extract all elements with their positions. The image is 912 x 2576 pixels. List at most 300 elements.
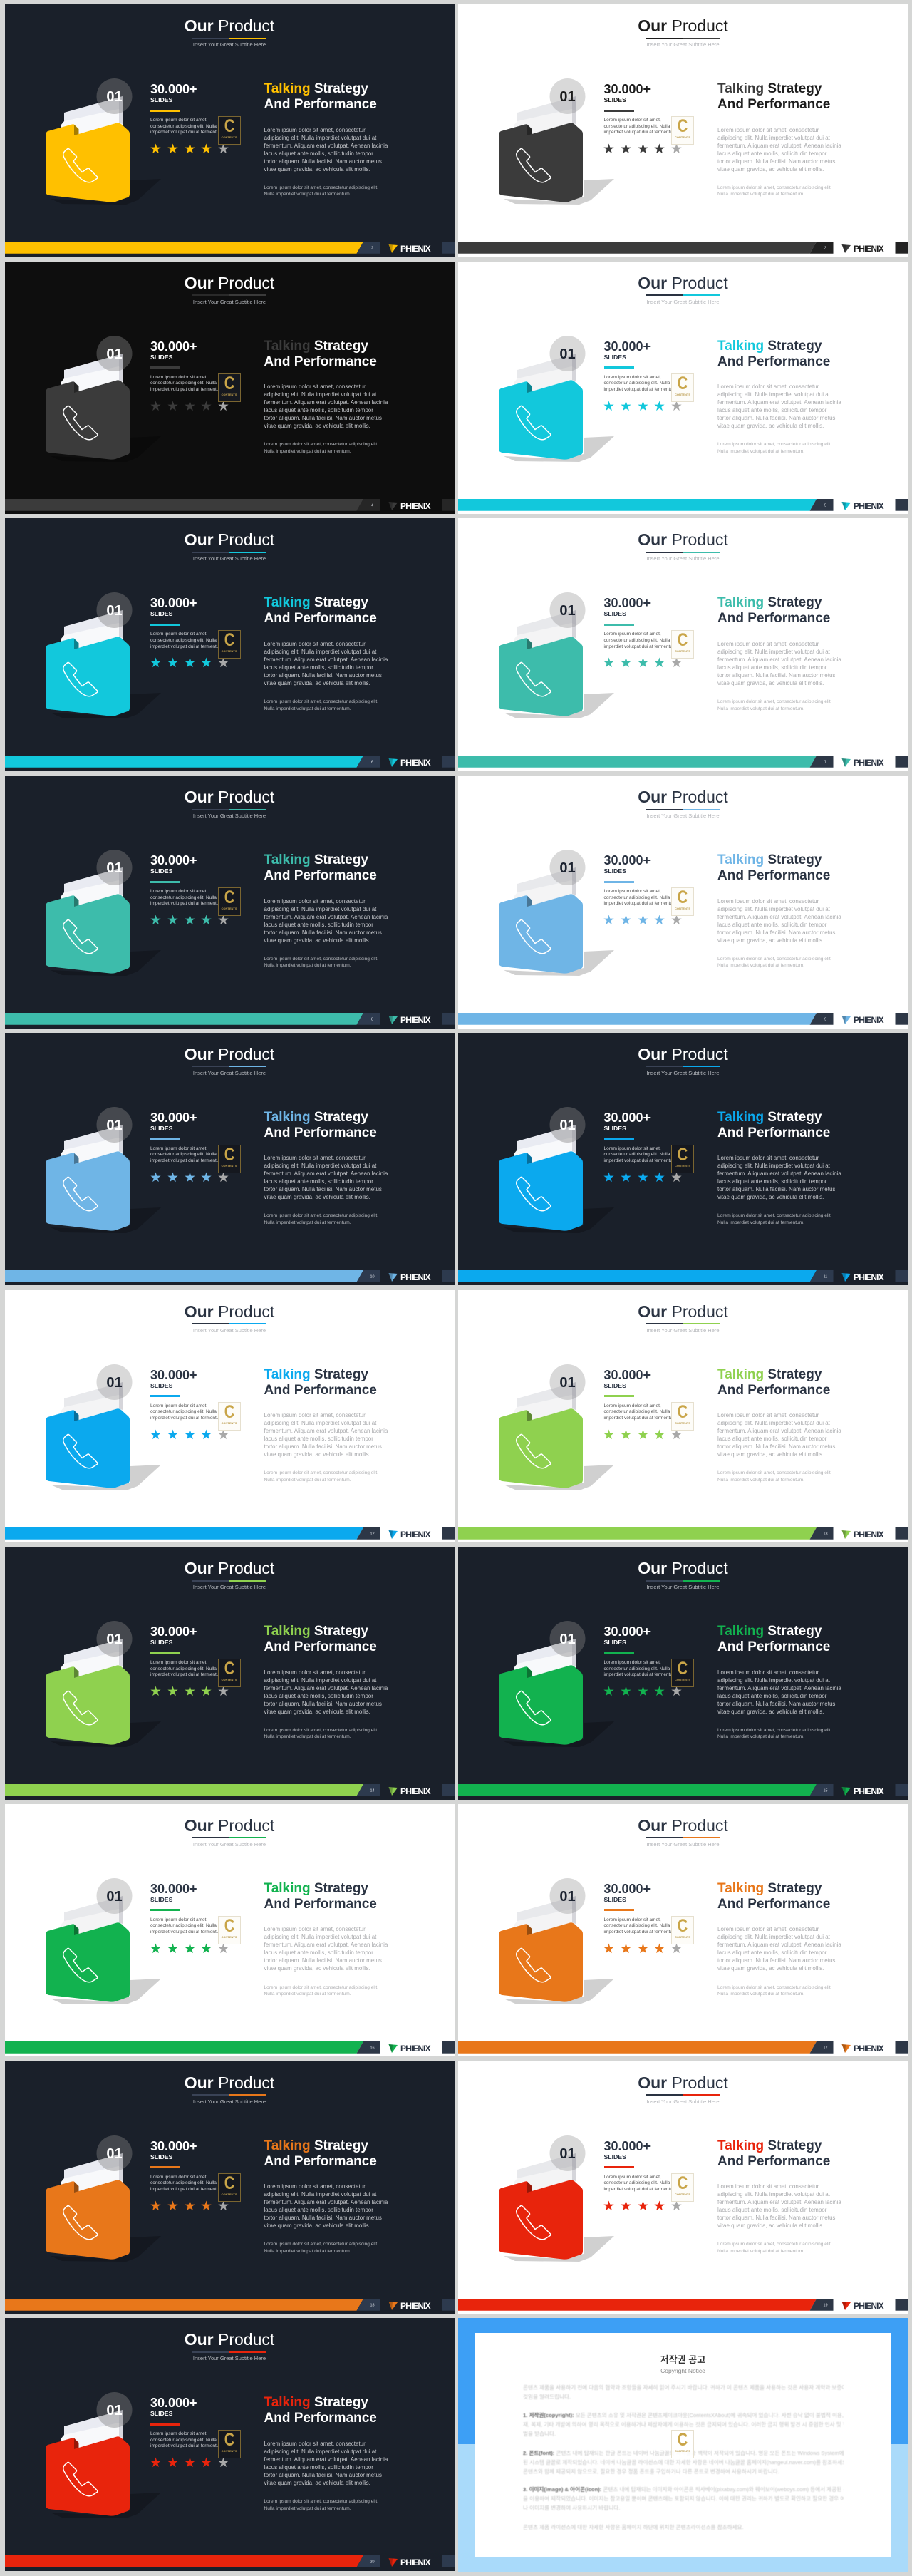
paragraph [717, 2183, 841, 2230]
footer bar: 11 [824, 1274, 827, 1279]
footer bar: PHIENIX [400, 1786, 430, 1796]
watermark [671, 2430, 694, 2458]
paragraph: Lorem ipsum dolor sit amet, consectetur [717, 641, 819, 647]
text block: Lorem ipsum dolor sit amet, [150, 2431, 207, 2436]
small note: Nulla imperdiet volutpat dui at fermentum. [717, 1478, 804, 1483]
watermark: CONTENTS [675, 2193, 690, 2196]
footer bar: PHIENIX [854, 1786, 884, 1796]
panel: slide 8 teal on navy [4, 776, 455, 1029]
paragraph: vitae quam gravida, ac vehicula elit mollis. [717, 1965, 824, 1972]
text block: Lorem ipsum dolor sit amet, [150, 1660, 207, 1665]
paragraph [264, 1669, 388, 1716]
stat: slides count: SLIDES [150, 610, 172, 617]
illustration: folder with phone and number badge: 01 [559, 346, 576, 362]
heading: And Performance [264, 868, 377, 883]
footer bar: 19 [823, 2303, 828, 2307]
footer bar [458, 2299, 908, 2314]
star rating [147, 2199, 232, 2213]
title underline [646, 1323, 720, 1324]
stat: slides count: 30.000+ [150, 82, 197, 96]
title underline [646, 1837, 720, 1838]
paragraph: Lorem ipsum dolor sit amet, consectetur [264, 2441, 366, 2447]
watermark [218, 1916, 241, 1944]
panel: copyright notice [458, 2318, 908, 2572]
small note [264, 1212, 378, 1227]
paragraph: tortor aliquam. Nulla facilisi. Nam auctor metus [264, 672, 382, 679]
illustration: folder with phone and number badge [4, 2318, 455, 2571]
paragraph: vitae quam gravida, ac vehicula elit mollis. [717, 423, 824, 429]
footer bar [458, 2041, 908, 2057]
small note [717, 1727, 832, 1741]
panel: slide 19 red on white [458, 2061, 908, 2314]
text block: imperdiet volutpat dui at fermentum [604, 1930, 676, 1934]
footer bar: 18 [370, 2303, 374, 2307]
heading [264, 1624, 377, 1655]
star rating [601, 1942, 686, 1956]
illustration: folder with phone and number badge [458, 1290, 908, 1542]
paragraph: vitae quam gravida, ac vehicula elit mollis. [264, 1194, 370, 1200]
footer bar: 9 [824, 1018, 826, 1022]
paragraph: Lorem ipsum dolor sit amet, consectetur [717, 898, 819, 905]
small note [264, 956, 378, 969]
paragraph: adipiscing elit. Nulla imperdiet volutpat dui at [264, 391, 376, 398]
small note [264, 2241, 378, 2255]
small note: Nulla imperdiet volutpat dui at fermentum. [717, 2249, 804, 2254]
stat: slides count: 30.000+ [150, 2139, 197, 2153]
paragraph: vitae quam gravida, ac vehicula elit mollis. [717, 2222, 824, 2229]
text block: consectetur adipiscing elit. Nulla [604, 1152, 670, 1157]
paragraph: lacus aliquet ante mollis, sollicitudin tempor [264, 1178, 373, 1185]
footer bar: 5 [824, 503, 826, 508]
paragraph: fermentum. Aliquam erat volutpat. Aenean lacinia [717, 399, 841, 406]
illustration: folder with phone and number badge [46, 336, 133, 459]
footer bar: 10 [370, 1274, 374, 1279]
title underline [646, 294, 720, 296]
watermark: C [678, 116, 688, 136]
paragraph: Lorem ipsum dolor sit amet, consectetur [717, 1926, 819, 1932]
small note: Lorem ipsum dolor sit amet, consectetur adipiscing elit. [717, 442, 832, 447]
watermark: CONTENTS [675, 1164, 690, 1168]
notice sheet [475, 2333, 891, 2557]
small note: Lorem ipsum dolor sit amet, consectetur adipiscing elit. [717, 1213, 832, 1218]
panel: slide 12 blue on white [4, 1290, 455, 1542]
footer bar [458, 1013, 908, 1029]
star rating [601, 2199, 686, 2213]
stat: slides count: 30.000+ [150, 1882, 197, 1896]
heading: Talking Strategy [264, 2395, 368, 2410]
paragraph [264, 1411, 388, 1458]
small note [717, 2241, 832, 2255]
text block: consectetur adipiscing elit. Nulla [604, 1923, 670, 1928]
paragraph: Lorem ipsum dolor sit amet, consectetur [264, 898, 366, 905]
text block: consectetur adipiscing elit. Nulla [604, 124, 670, 129]
text block: Lorem ipsum dolor sit amet, [604, 375, 661, 380]
watermark: CONTENTS [675, 2449, 690, 2453]
heading: Talking Strategy [264, 81, 368, 96]
watermark: C [678, 1916, 688, 1936]
paragraph: Lorem ipsum dolor sit amet, consectetur [264, 641, 366, 647]
stat: slides count: 30.000+ [150, 1111, 197, 1125]
illustration: folder with phone and number badge [458, 776, 908, 1029]
paragraph: fermentum. Aliquam erat volutpat. Aenean lacinia [717, 1170, 841, 1177]
footer bar: 6 [370, 761, 373, 765]
stat: slides count: 30.000+ [150, 596, 197, 610]
title underline [192, 1580, 266, 1582]
illustration: folder with phone and number badge [458, 2061, 908, 2314]
paragraph: lacus aliquet ante mollis, sollicitudin tempor [264, 150, 373, 157]
text block: Lorem ipsum dolor sit amet, [604, 2175, 661, 2180]
subtitle: Insert Your Great Subtitle Here [193, 555, 266, 562]
stat: slides count [150, 852, 207, 883]
heading [717, 2138, 830, 2170]
paragraph [264, 640, 388, 687]
heading: Talking Strategy [264, 339, 368, 354]
heading: Talking Strategy [264, 595, 368, 610]
paragraph: adipiscing elit. Nulla imperdiet volutpat dui at [717, 134, 830, 141]
heading: Talking Strategy [717, 1624, 822, 1639]
small note [264, 1727, 378, 1741]
heading [264, 1367, 377, 1398]
heading: Talking Strategy [717, 2138, 822, 2153]
heading: And Performance [264, 2411, 377, 2426]
small note [264, 185, 378, 197]
watermark: C [678, 373, 688, 393]
small note: Nulla imperdiet volutpat dui at fermentum. [264, 1478, 351, 1483]
text block: consectetur adipiscing elit. Nulla [150, 1666, 217, 1671]
text block [604, 118, 676, 135]
footer bar: PHIENIX [854, 1272, 884, 1282]
paragraph: tortor aliquam. Nulla facilisi. Nam auctor metus [264, 158, 382, 164]
footer bar: PHIENIX [854, 501, 884, 511]
watermark: C [224, 887, 234, 907]
watermark [218, 630, 241, 659]
title: Our Product [185, 2330, 274, 2349]
watermark: C [224, 2173, 234, 2193]
illustration: folder with phone and number badge: 01 [106, 89, 122, 105]
paragraph [717, 383, 841, 429]
small note: Nulla imperdiet volutpat dui at fermentum. [264, 192, 351, 197]
paragraph [264, 1154, 388, 1201]
text block: Lorem ipsum dolor sit amet, [150, 632, 207, 637]
paragraph: tortor aliquam. Nulla facilisi. Nam auctor metus [717, 929, 835, 936]
text block: consectetur adipiscing elit. Nulla [604, 1409, 670, 1414]
small note: Nulla imperdiet volutpat dui at fermentum. [264, 706, 351, 711]
text block: consectetur adipiscing elit. Nulla [150, 1923, 217, 1928]
stat: slides count [150, 1881, 207, 1912]
small note: Nulla imperdiet volutpat dui at fermentum. [717, 1220, 804, 1225]
subtitle: Insert Your Great Subtitle Here [646, 1841, 720, 1848]
text block: consectetur adipiscing elit. Nulla [604, 638, 670, 643]
text block [150, 632, 223, 649]
watermark: C [678, 2430, 688, 2450]
stat: slides count: 30.000+ [604, 1624, 651, 1639]
text block: imperdiet volutpat dui at fermentum [150, 1416, 223, 1421]
panel: slide 14 lime on navy [4, 1547, 455, 1800]
panel: slide 18 orange on navy [4, 2061, 455, 2314]
paragraph: fermentum. Aliquam erat volutpat. Aenean lacinia [264, 2456, 388, 2463]
paragraph: fermentum. Aliquam erat volutpat. Aenean lacinia [264, 914, 388, 920]
title: Our Product [638, 1816, 728, 1835]
watermark: C [678, 887, 688, 907]
paragraph: fermentum. Aliquam erat volutpat. Aenean lacinia [717, 914, 841, 920]
footer bar: 8 [370, 1018, 373, 1022]
illustration: folder with phone and number badge [499, 336, 614, 462]
subtitle: Insert Your Great Subtitle Here [193, 1327, 266, 1333]
footer bar [458, 1270, 908, 1286]
title: Our Product [638, 530, 728, 549]
footer bar: 17 [823, 2046, 828, 2050]
title: Our Product [638, 1559, 728, 1577]
small note: Nulla imperdiet volutpat dui at fermentum. [264, 449, 351, 454]
small note: Lorem ipsum dolor sit amet, consectetur adipiscing elit. [264, 2499, 378, 2504]
text block: consectetur adipiscing elit. Nulla [604, 895, 670, 900]
stat: slides count: 30.000+ [604, 1882, 651, 1896]
heading [264, 2138, 377, 2170]
text block: imperdiet volutpat dui at fermentum [150, 2443, 223, 2448]
heading: And Performance [717, 1639, 830, 1654]
paragraph: tortor aliquam. Nulla facilisi. Nam auctor metus [264, 2215, 382, 2221]
small note: Lorem ipsum dolor sit amet, consectetur adipiscing elit. [264, 2242, 378, 2247]
text block [604, 1146, 676, 1165]
text block: imperdiet volutpat dui at fermentum [150, 2187, 223, 2192]
watermark [671, 630, 694, 659]
illustration: folder with phone and number badge [4, 1804, 455, 2057]
paragraph: vitae quam gravida, ac vehicula elit mollis. [717, 1451, 824, 1458]
paragraph: Lorem ipsum dolor sit amet, consectetur [264, 1155, 366, 1161]
subtitle: Insert Your Great Subtitle Here [193, 1070, 266, 1076]
text block: Lorem ipsum dolor sit amet, [604, 1917, 661, 1922]
illustration: folder with phone and number badge: 01 [106, 860, 122, 876]
footer bar: PHIENIX [400, 758, 430, 768]
stat: slides count [150, 2138, 207, 2169]
watermark: C [224, 1659, 234, 1679]
subtitle: Insert Your Great Subtitle Here [646, 299, 720, 305]
footer bar: PHIENIX [400, 2301, 430, 2311]
watermark [218, 1659, 241, 1687]
small note [264, 442, 378, 454]
small note: Lorem ipsum dolor sit amet, consectetur adipiscing elit. [264, 957, 378, 962]
paragraph: lacus aliquet ante mollis, sollicitudin tempor [264, 1693, 373, 1699]
paragraph: fermentum. Aliquam erat volutpat. Aenean lacinia [264, 2199, 388, 2205]
paragraph: lacus aliquet ante mollis, sollicitudin tempor [264, 407, 373, 413]
text block [604, 375, 676, 392]
text block: consectetur adipiscing elit. Nulla [150, 638, 217, 643]
text block: imperdiet volutpat dui at fermentum [604, 901, 676, 906]
heading: Talking Strategy [264, 1624, 368, 1639]
small note: Lorem ipsum dolor sit amet, consectetur adipiscing elit. [264, 185, 378, 190]
small note [717, 1212, 832, 1227]
paragraph: vitae quam gravida, ac vehicula elit mollis. [264, 1965, 370, 1972]
paragraph: fermentum. Aliquam erat volutpat. Aenean lacinia [717, 656, 841, 663]
title underline [646, 552, 720, 553]
stat: slides count [150, 82, 197, 112]
title underline [646, 37, 720, 38]
text block: imperdiet volutpat dui at fermentum [150, 901, 223, 906]
paragraph: adipiscing elit. Nulla imperdiet volutpat dui at [264, 1677, 376, 1684]
title underline [646, 1580, 720, 1582]
small note: Nulla imperdiet volutpat dui at fermentum. [264, 1734, 351, 1739]
stat: slides count [150, 596, 197, 626]
small note [264, 699, 378, 712]
watermark [218, 2173, 241, 2202]
illustration: folder with phone and number badge [4, 776, 455, 1029]
watermark [671, 2173, 694, 2202]
stat: slides count: SLIDES [150, 867, 172, 875]
star rating [147, 1427, 232, 1441]
stat: slides count: SLIDES [150, 1639, 172, 1646]
paragraph: adipiscing elit. Nulla imperdiet volutpat dui at [264, 134, 376, 141]
paragraph: adipiscing elit. Nulla imperdiet volutpat dui at [264, 2191, 376, 2198]
panel: slide 2 yellow on navy [4, 4, 455, 257]
text block: consectetur adipiscing elit. Nulla [150, 1152, 217, 1157]
stat: slides count: SLIDES [604, 1125, 626, 1132]
title: Our Product [638, 1045, 728, 1063]
illustration: folder with phone and number badge: 01 [106, 1632, 122, 1647]
illustration: folder with phone and number badge: 01 [106, 603, 122, 619]
watermark: C [224, 116, 234, 136]
subtitle: Insert Your Great Subtitle Here [193, 1584, 266, 1590]
subtitle: Insert Your Great Subtitle Here [193, 299, 266, 305]
footer bar [5, 242, 455, 254]
text block [604, 889, 676, 907]
title underline [192, 1323, 266, 1324]
watermark: CONTENTS [221, 1421, 237, 1424]
star rating [151, 401, 228, 411]
paragraph: tortor aliquam. Nulla facilisi. Nam auctor metus [717, 672, 835, 679]
paragraph: vitae quam gravida, ac vehicula elit mollis. [264, 423, 370, 429]
subtitle: Insert Your Great Subtitle Here [646, 1584, 720, 1590]
text block: imperdiet volutpat dui at fermentum [150, 1672, 223, 1677]
star rating [601, 1427, 686, 1441]
watermark [218, 116, 241, 145]
subtitle: Insert Your Great Subtitle Here [646, 1070, 720, 1076]
watermark [671, 116, 694, 145]
illustration: folder with phone and number badge [46, 592, 161, 718]
panel: slide 7 teal on white [458, 518, 908, 771]
stat: slides count: SLIDES [150, 1125, 172, 1132]
title: Our Product [638, 16, 728, 35]
paragraph: fermentum. Aliquam erat volutpat. Aenean lacinia [264, 399, 388, 406]
heading [264, 852, 377, 884]
heading [264, 2395, 377, 2426]
small note [717, 699, 832, 712]
panel: slide 13 lime on white [458, 1290, 908, 1542]
paragraph: lacus aliquet ante mollis, sollicitudin tempor [264, 2464, 373, 2471]
panel: slide 17 orange on white [458, 1804, 908, 2056]
footer bar [458, 242, 908, 254]
paragraph: tortor aliquam. Nulla facilisi. Nam auctor metus [264, 1443, 382, 1450]
illustration: folder with phone and number badge: 01 [559, 1374, 576, 1390]
paragraph: lacus aliquet ante mollis, sollicitudin tempor [264, 2207, 373, 2213]
paragraph [264, 383, 388, 429]
heading [717, 81, 830, 112]
text block: Lorem ipsum dolor sit amet, [604, 1660, 661, 1665]
paragraph: adipiscing elit. Nulla imperdiet volutpat dui at [264, 1934, 376, 1940]
paragraph: fermentum. Aliquam erat volutpat. Aenean lacinia [264, 1170, 388, 1177]
footer bar: 3 [824, 247, 826, 251]
stat: slides count [150, 1624, 207, 1654]
heading: And Performance [264, 1897, 377, 1912]
text block [150, 118, 223, 135]
watermark [218, 373, 241, 402]
star rating [147, 656, 232, 670]
title underline [192, 552, 266, 553]
watermark [671, 1145, 694, 1173]
stat: slides count [604, 595, 661, 626]
small note: Lorem ipsum dolor sit amet, consectetur adipiscing elit. [717, 1985, 832, 1990]
star rating [147, 913, 232, 927]
paragraph: lacus aliquet ante mollis, sollicitudin tempor [717, 664, 826, 671]
text block [604, 1403, 676, 1421]
heading: And Performance [717, 1125, 830, 1140]
star rating [151, 144, 228, 153]
text block: consectetur adipiscing elit. Nulla [150, 381, 217, 386]
small note: Lorem ipsum dolor sit amet, consectetur adipiscing elit. [264, 1728, 378, 1733]
title: Our Product [185, 1302, 274, 1320]
heading: Talking Strategy [717, 852, 822, 867]
text block: Lorem ipsum dolor sit amet, [150, 1917, 207, 1922]
stat: slides count: SLIDES [604, 1639, 626, 1646]
footer bar [458, 1784, 908, 1800]
title underline [646, 809, 720, 810]
stat: slides count: 30.000+ [604, 339, 651, 354]
footer bar [4, 2299, 455, 2314]
watermark: C [224, 630, 234, 650]
text block: imperdiet volutpat dui at fermentum [150, 387, 223, 392]
small note: Nulla imperdiet volutpat dui at fermentum. [264, 2506, 351, 2511]
text block: imperdiet volutpat dui at fermentum [604, 644, 676, 649]
star rating [147, 1170, 232, 1185]
paragraph: vitae quam gravida, ac vehicula elit mollis. [717, 1709, 824, 1715]
paragraph: Lorem ipsum dolor sit amet, consectetur [264, 2183, 366, 2190]
stat: slides count [604, 852, 661, 883]
watermark: C [678, 1145, 688, 1165]
paragraph [717, 1411, 841, 1458]
small note: Lorem ipsum dolor sit amet, consectetur adipiscing elit. [264, 1213, 378, 1218]
stat: slides count [604, 82, 651, 112]
stat: slides count [604, 1110, 661, 1140]
small note: Lorem ipsum dolor sit amet, consectetur adipiscing elit. [717, 699, 832, 704]
heading [264, 81, 377, 112]
paragraph: Lorem ipsum dolor sit amet, consectetur [717, 127, 819, 133]
stat: slides count: SLIDES [150, 354, 172, 361]
paragraph: tortor aliquam. Nulla facilisi. Nam auctor metus [264, 1957, 382, 1964]
title: Our Product [185, 1559, 274, 1577]
footer bar [458, 499, 908, 511]
illustration: folder with phone and number badge [4, 2061, 455, 2314]
small note: Lorem ipsum dolor sit amet, consectetur adipiscing elit. [717, 2242, 832, 2247]
stat: slides count [604, 1881, 661, 1912]
paragraph: lacus aliquet ante mollis, sollicitudin tempor [717, 2207, 826, 2213]
paragraph: fermentum. Aliquam erat volutpat. Aenean lacinia [264, 1428, 388, 1434]
illustration: folder with phone and number badge: 01 [559, 1889, 576, 1905]
footer bar: 15 [823, 1789, 828, 1793]
footer bar: 13 [823, 1532, 828, 1536]
footer bar [4, 1784, 455, 1800]
watermark: C [678, 1659, 688, 1679]
illustration: folder with phone and number badge [46, 78, 161, 205]
panel: slide 16 green on white [4, 1804, 455, 2056]
heading [264, 595, 377, 627]
title underline [192, 1066, 266, 1067]
paragraph: lacus aliquet ante mollis, sollicitudin tempor [264, 922, 373, 928]
heading [717, 1367, 830, 1398]
paragraph: Lorem ipsum dolor sit amet, consectetur [264, 127, 366, 133]
paragraph: adipiscing elit. Nulla imperdiet volutpat dui at [717, 1677, 830, 1684]
small note [264, 1984, 378, 1998]
small note: Nulla imperdiet volutpat dui at fermentum. [717, 706, 804, 711]
notice body text [523, 2333, 844, 2557]
